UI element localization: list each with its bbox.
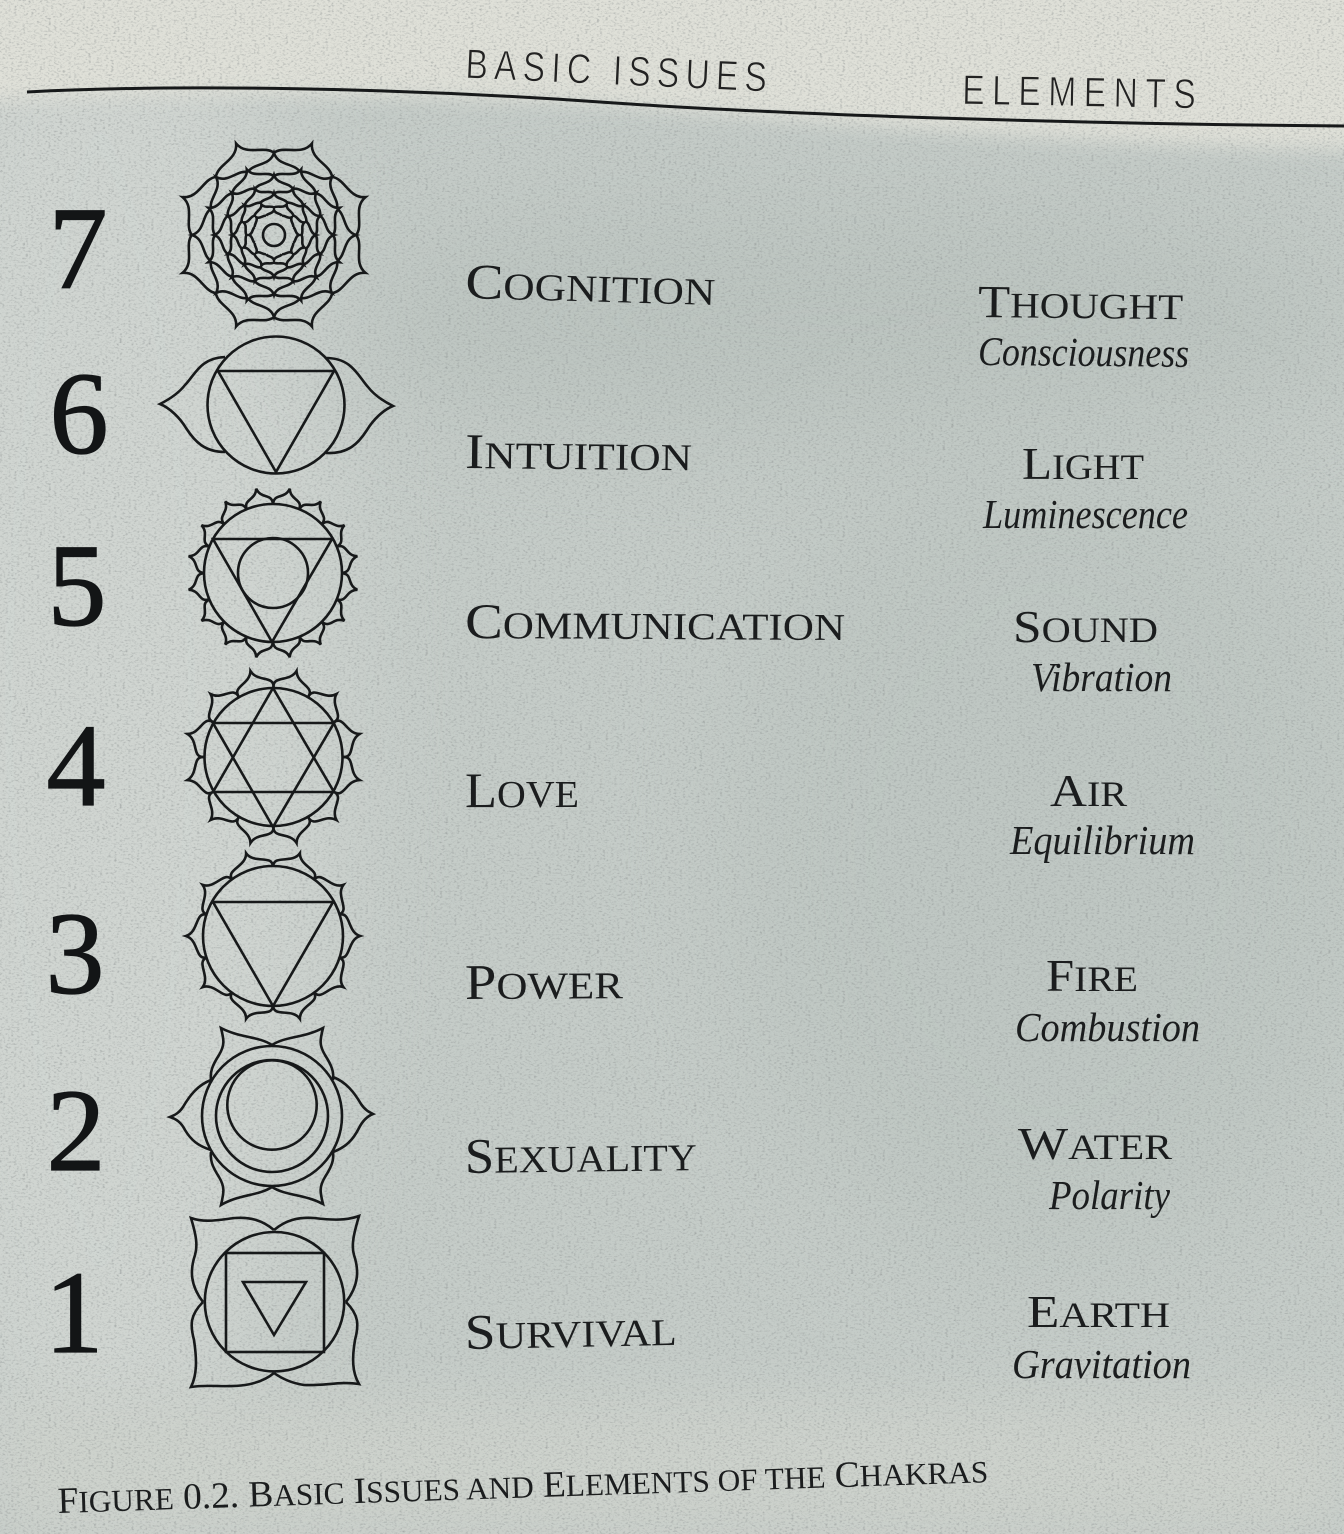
- chakra number 7: 7: [48, 183, 108, 314]
- element note: polarity: Polarity: [1048, 1172, 1171, 1218]
- chakra number 1: 1: [44, 1247, 104, 1378]
- element note: equilibrium: Equilibrium: [1009, 817, 1195, 863]
- element: air: AIR: [1050, 765, 1127, 816]
- icon: solar plexus chakra: [186, 847, 360, 1025]
- header rule: [27, 88, 1344, 126]
- label: cognition: COGNITION: [465, 253, 716, 316]
- chakra number 5: 5: [48, 520, 106, 651]
- element note: combustion: Combustion: [1015, 1004, 1200, 1050]
- element: thought: THOUGHT: [978, 276, 1183, 329]
- element: water: WATER: [1018, 1118, 1172, 1169]
- label: communication: COMMUNICATION: [465, 593, 845, 651]
- icon: third eye chakra: [160, 336, 393, 474]
- chakra number 3: 3: [46, 888, 104, 1019]
- figure caption: FIGURE 0.2. BASIC ISSUES AND ELEMENTS OF THE CHAKRAS: [57, 1450, 989, 1522]
- chakra number 6: 6: [50, 348, 108, 479]
- element note: vibration: Vibration: [1031, 654, 1172, 700]
- icon: heart chakra: [183, 666, 364, 848]
- chakra number 4: 4: [46, 700, 106, 831]
- heading: elements: ELEMENTS: [962, 68, 1196, 118]
- label: intuition: INTUITION: [465, 423, 692, 481]
- label: love: LOVE: [465, 762, 579, 818]
- icon: sacral chakra: [170, 1028, 373, 1205]
- icon: crown chakra lotus: [145, 106, 403, 364]
- icon: throat chakra: [186, 486, 360, 660]
- label: sexuality: SEXUALITY: [464, 1125, 697, 1184]
- element: earth: EARTH: [1027, 1286, 1170, 1337]
- element note: consciousness: Consciousness: [978, 328, 1189, 376]
- heading: basic issues: BASIC ISSUES: [465, 42, 768, 102]
- element: light: LIGHT: [1022, 438, 1144, 489]
- element: sound: SOUND: [1013, 601, 1158, 652]
- label: survival: SURVIVAL: [464, 1300, 677, 1360]
- icon: root chakra: [191, 1216, 359, 1387]
- element note: luminescence: Luminescence: [982, 491, 1188, 537]
- element: fire: FIRE: [1046, 950, 1138, 1001]
- chakra number 2: 2: [46, 1065, 106, 1196]
- element note: gravitation: Gravitation: [1012, 1341, 1191, 1387]
- label: power: POWER: [465, 953, 624, 1010]
